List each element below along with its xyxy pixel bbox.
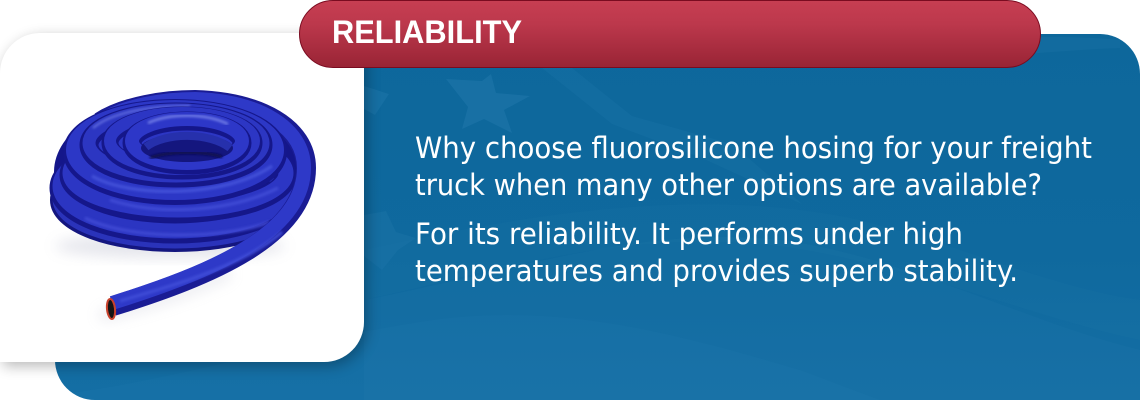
text block: why choose [415,131,1092,202]
hose: third stacked ring [70,136,286,212]
hose: cut end opening [106,299,116,319]
hose: second stacked ring [60,141,290,235]
hose: third upper ring [110,113,254,171]
icon: blue coiled silicone hose [54,96,306,319]
hose: large upper ring [74,108,276,194]
text block: for its reliability [415,217,1018,288]
panel: white product card [0,33,367,366]
hose: second upper ring [89,106,263,178]
text block: for its reliability: temperatures and provides superb stability. [415,254,1018,288]
text block: why choose: Why choose fluorosilicone hosing for your freight [415,131,1092,165]
hose: lowest ring [59,156,291,243]
hose: tail end running to cut opening [100,99,306,306]
hose: centre hole [141,134,233,162]
heading: reliability: RELIABILITY [332,14,522,50]
text block: for its reliability: For its reliability. It performs under high [415,217,963,251]
title banner [300,0,1040,68]
hose: inner ring [132,116,242,165]
text block: why choose: truck when many other options are available? [415,168,1042,202]
